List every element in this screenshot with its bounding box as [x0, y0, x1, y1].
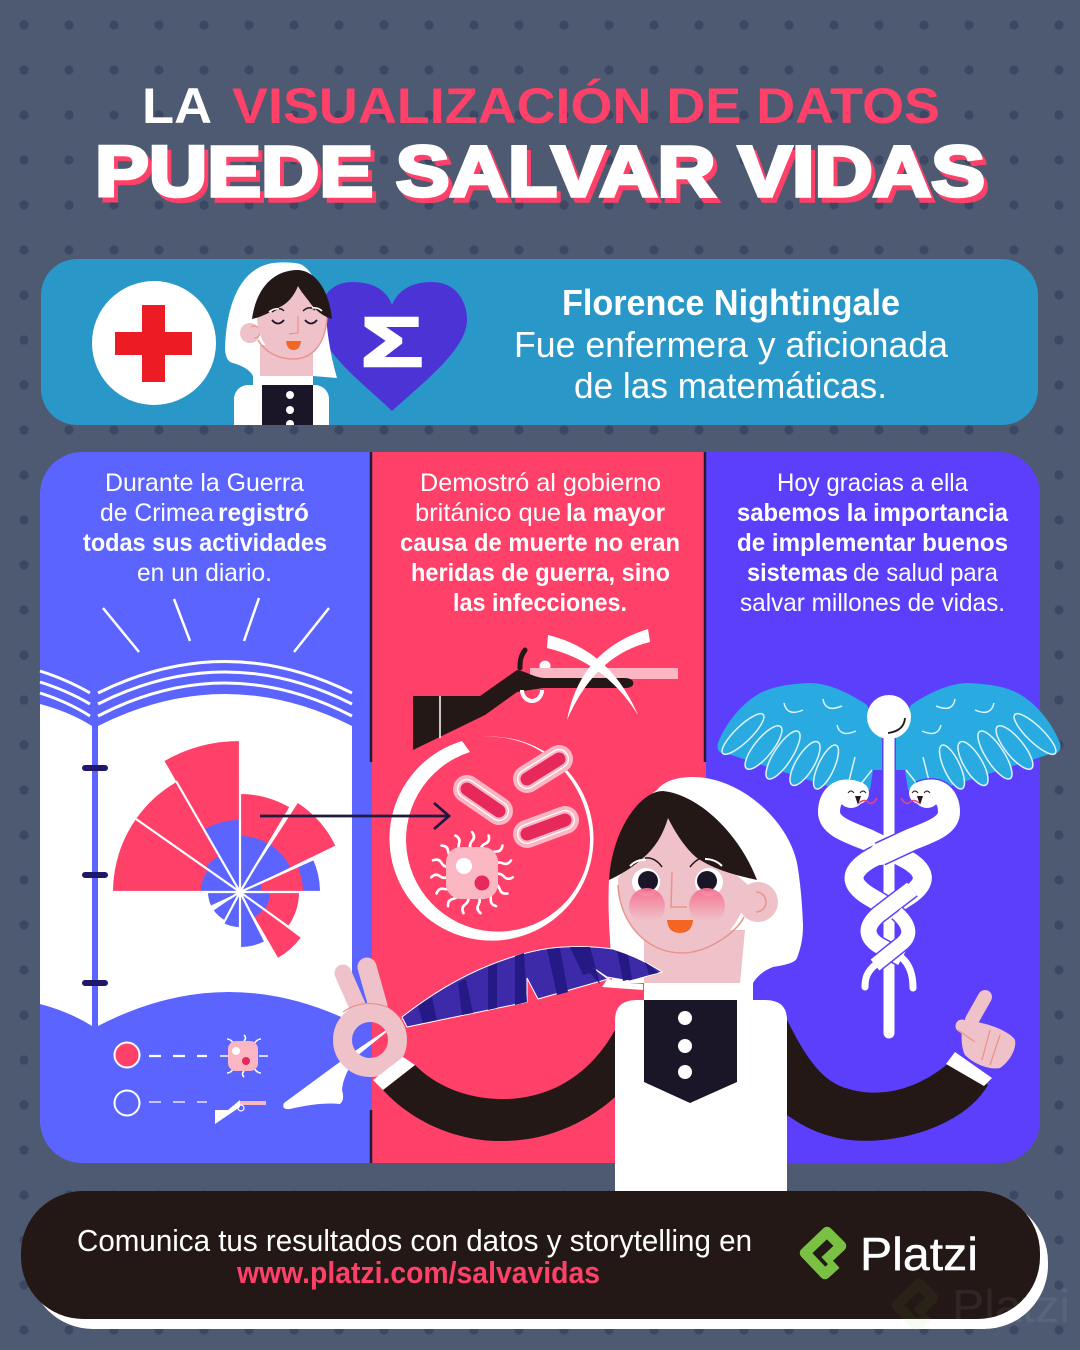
icon: heart with sigma: Σ [361, 303, 423, 381]
text: column 2: Demostró al gobierno [420, 469, 661, 497]
wing left [717, 683, 882, 792]
wing right [896, 683, 1061, 792]
text: column 3: sabemos la importancia [737, 499, 1009, 527]
text: Florence Nightingale: de las matemáticas. [574, 365, 887, 406]
logo: Platzi: Platzi [860, 1228, 978, 1280]
legend: infections vs war wounds [114, 1035, 268, 1124]
title: LA [142, 78, 212, 134]
text: column 1 [83, 469, 327, 587]
torso with vest and buttons [615, 983, 787, 1195]
bacterium 1 [467, 789, 499, 811]
snakes [829, 782, 949, 988]
text: column 3: de salud para [853, 559, 998, 587]
text: column 3: de implementar buenos [737, 529, 1008, 557]
feather quill [283, 947, 662, 1109]
right hand pointing [946, 997, 1015, 1086]
panel: footer call to action [21, 1191, 1070, 1332]
hood [609, 777, 803, 983]
logo: faint watermark [897, 1280, 1070, 1332]
neck and face [618, 815, 778, 984]
text: column 3: Hoy gracias a ella [777, 469, 968, 497]
panel: Florence Nightingale banner [41, 259, 1038, 425]
icon: heart with sigma [318, 282, 467, 411]
text: column 3 [737, 469, 1009, 617]
illustration: small portrait of Florence [225, 262, 337, 425]
text: column 1: en un diario. [137, 559, 272, 587]
title [95, 78, 989, 217]
text: column 2: heridas de guerra, sino [411, 559, 670, 587]
text: column 3: sistemas [747, 559, 848, 587]
bacterium 2 [527, 759, 559, 779]
arrow: from rose chart to germs [260, 803, 449, 829]
text: Florence Nightingale: Florence Nightingale [562, 282, 900, 323]
panel: three coloured columns [40, 452, 1040, 1170]
left arm sleeve [383, 1030, 615, 1141]
text: column 2: británico que [415, 499, 561, 527]
nose and mouth [667, 872, 693, 933]
text: column 1: registró [218, 499, 309, 527]
title: PUEDE SALVAR VIDAS [95, 133, 985, 212]
logo: Platzi [805, 1228, 978, 1280]
title: PUEDE SALVAR VIDAS [99, 138, 989, 217]
text: column 2 [400, 469, 680, 617]
bacterium 3 [527, 820, 565, 834]
illustration: open book [40, 598, 352, 1026]
text: column 2: causa de muerte no eran [400, 529, 680, 557]
text: column 1: todas sus actividades [83, 529, 327, 557]
icon: red cross [92, 281, 216, 405]
text: column 2: la mayor [566, 499, 665, 527]
text: footer message: www.platzi.com/salvavidas [236, 1255, 600, 1290]
germ [431, 832, 513, 914]
text: column 1: de Crimea [100, 499, 214, 527]
text: column 1: Durante la Guerra [105, 469, 304, 497]
right arm sleeve [787, 1020, 988, 1141]
text: column 3: salvar millones de vidas. [740, 589, 1005, 617]
text: column 2: las infecciones. [453, 589, 627, 617]
illustration: Florence Nightingale large figure [283, 777, 1015, 1195]
text: Florence Nightingale [514, 282, 949, 406]
eyes [629, 858, 725, 924]
left hand holding feather [342, 967, 415, 1090]
text: footer message: Comunica tus resultados con datos y storytelling en [77, 1223, 752, 1258]
illustration: caduceus [717, 683, 1061, 1033]
title: VISUALIZACIÓN DE DATOS [232, 78, 940, 134]
illustration: musket crossed out [413, 629, 678, 750]
text: Florence Nightingale: Fue enfermera y aficionada [514, 324, 949, 365]
logo: faint watermark: Platzi [952, 1280, 1070, 1332]
chart: polar area (rose) diagram [113, 738, 335, 958]
staff [867, 695, 911, 1033]
hair [609, 791, 757, 880]
illustration: microscope circle with germs [389, 737, 593, 941]
text: footer message [77, 1223, 752, 1290]
